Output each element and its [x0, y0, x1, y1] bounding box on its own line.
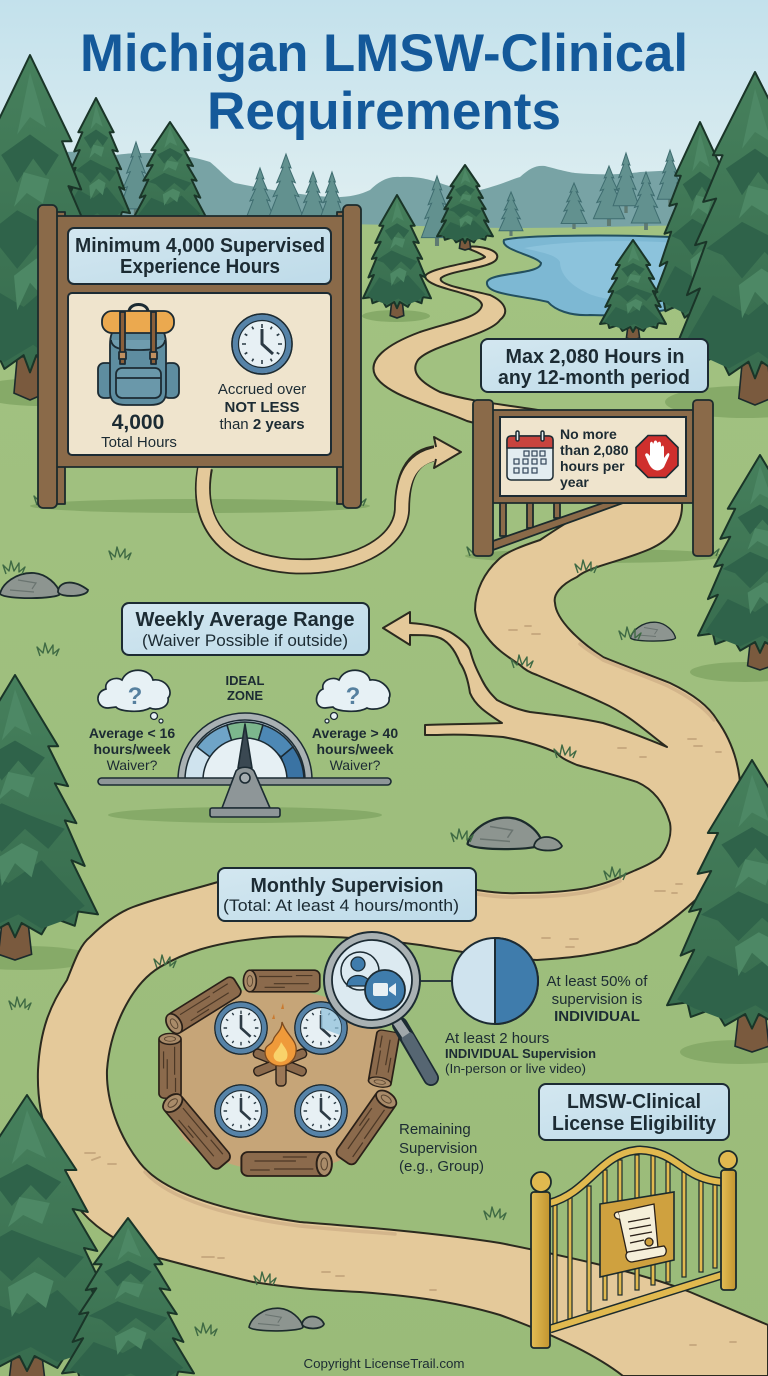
- trail: main section with branch arrow to weekly range: [38, 503, 768, 1376]
- campfire: [252, 1003, 308, 1086]
- thought cloud left: ?: [128, 683, 142, 710]
- label: average under 16: hours/week: [93, 741, 171, 757]
- header panel: Weekly Average Range: [136, 609, 354, 631]
- icon: stop hand: [636, 436, 678, 478]
- arch and bottom rail: [550, 1150, 722, 1329]
- arrow: sign 1 to sign 2: [203, 437, 461, 566]
- label: 4,000 total hours: Total Hours: [101, 434, 177, 451]
- plaque: [600, 1192, 674, 1277]
- bars: [553, 1155, 717, 1325]
- background: sky: [0, 0, 768, 240]
- label: ideal zone: IDEAL: [226, 673, 265, 688]
- left post: [531, 1172, 551, 1348]
- title: [80, 24, 688, 141]
- tree: right lower: [667, 760, 768, 1052]
- header panel: [68, 228, 331, 284]
- label: average over 40: [312, 725, 398, 773]
- label: average over 40: Waiver?: [330, 757, 381, 773]
- distant tree line: [119, 142, 683, 246]
- header: license eligibility: [539, 1084, 729, 1140]
- grass tufts: [3, 492, 719, 1336]
- gate rails: [493, 500, 623, 550]
- gate sign: max hours: [473, 400, 713, 556]
- connector line: [420, 980, 452, 982]
- log seats: [159, 970, 400, 1176]
- distant hills: [0, 152, 768, 260]
- shadow: [108, 807, 382, 823]
- label: accrued over not less than 2 years: Accrued over: [218, 381, 306, 398]
- header: monthly supervision: Monthly Supervision: [250, 875, 444, 897]
- label: at least 2 hours: [445, 1030, 596, 1076]
- header: monthly supervision: (Total: At least 4 hours/month): [223, 897, 459, 915]
- clearing ground: [167, 989, 391, 1172]
- icon: clock: [232, 314, 292, 374]
- label: remaining supervision: Supervision: [399, 1140, 477, 1157]
- icon: person: [341, 952, 379, 990]
- header: license eligibility: License Eligibility: [552, 1112, 717, 1135]
- sign: minimum hours: [38, 205, 361, 508]
- content panel: [68, 293, 331, 455]
- lake: [487, 236, 695, 315]
- tree: left middle: [0, 675, 98, 960]
- pie chart: 50 percent individual: [452, 938, 538, 1024]
- gate posts and board: [473, 400, 713, 556]
- label: at least 50 percent: supervision is: [552, 991, 642, 1008]
- label: remaining supervision: [399, 1121, 484, 1175]
- icon: video camera: [365, 970, 405, 1010]
- header panel: Minimum 4,000 Supervised: [75, 235, 325, 257]
- label: 4,000 total hours: [101, 411, 177, 451]
- header panel: Experience Hours: [120, 256, 280, 278]
- gate text: [560, 426, 629, 490]
- fulcrum and needle: [210, 724, 280, 817]
- label: at least 2 hours: (In-person or live video): [445, 1062, 586, 1076]
- tree: bottom left: [0, 1095, 194, 1376]
- label: at least 50 percent: [547, 973, 648, 1025]
- gauge: [178, 713, 312, 780]
- campfire clearing: [159, 970, 400, 1176]
- section: weekly average range: [89, 603, 398, 823]
- icon: calendar: [507, 431, 553, 480]
- label: ideal zone: [226, 673, 265, 703]
- rocks: [0, 573, 676, 1331]
- tree: centre: [363, 195, 431, 318]
- scroll: [614, 1204, 666, 1262]
- clocks: [215, 1002, 347, 1137]
- label: accrued over not less than 2 years: NOT LESS: [224, 399, 300, 416]
- label: remaining supervision: Remaining: [399, 1121, 471, 1138]
- label: 4,000 total hours: 4,000: [112, 411, 164, 434]
- ground shadows: [0, 310, 768, 1064]
- balance beam: [98, 778, 391, 785]
- label: accrued over not less than 2 years: than 2 years: [219, 416, 305, 433]
- label: average under 16: [89, 725, 175, 773]
- lake highlights: [524, 241, 680, 301]
- label: average over 40: Average > 40: [312, 725, 398, 741]
- label: at least 50 percent: At least 50% of: [547, 973, 648, 990]
- title: Requirements: [207, 82, 561, 141]
- label: average under 16: Average < 16: [89, 725, 175, 741]
- label: remaining supervision: (e.g., Group): [399, 1158, 484, 1175]
- trail: upper winding section: [373, 247, 550, 430]
- tree: horizon pine: [437, 165, 493, 250]
- header: license eligibility: LMSW-Clinical: [567, 1090, 701, 1113]
- gate text: No more: [560, 426, 617, 442]
- label: at least 50 percent: INDIVIDUAL: [554, 1008, 640, 1025]
- header: monthly supervision: [218, 868, 476, 921]
- gate text: year: [560, 474, 589, 490]
- title: Michigan LMSW-Clinical: [80, 24, 688, 83]
- header: max 2,080 hours: [481, 339, 708, 392]
- header panel: [122, 603, 369, 655]
- header: max 2,080 hours: Max 2,080 Hours in: [506, 346, 684, 368]
- magnifying glass: [324, 932, 431, 1078]
- right post: [719, 1151, 737, 1290]
- tree: right middle: [698, 455, 768, 670]
- label: at least 2 hours: INDIVIDUAL Supervision: [445, 1046, 596, 1061]
- gate text: hours per: [560, 458, 625, 474]
- icon: backpack: [98, 304, 179, 405]
- header panel: (Waiver Possible if outside): [142, 631, 348, 650]
- thought cloud right: ?: [346, 683, 360, 710]
- copyright: Copyright LicenseTrail.com: [304, 1357, 464, 1371]
- trail edge shading: [145, 644, 714, 1234]
- label: ideal zone: ZONE: [227, 688, 263, 703]
- sign posts and board: [38, 205, 361, 508]
- label: average under 16: Waiver?: [107, 757, 158, 773]
- tree: right cluster: [600, 72, 768, 405]
- label: accrued over not less than 2 years: [218, 381, 306, 433]
- thought cloud right: [316, 670, 390, 723]
- label: average over 40: hours/week: [316, 741, 394, 757]
- golden gate: [531, 1150, 737, 1348]
- trail pebbles: [85, 626, 736, 1345]
- gate content panel: [500, 417, 686, 496]
- header: max 2,080 hours: any 12-month period: [498, 367, 690, 389]
- label: at least 2 hours: At least 2 hours: [445, 1030, 549, 1047]
- tree: upper left cluster: [0, 55, 206, 400]
- thought cloud left: [98, 670, 170, 723]
- gate text: than 2,080: [560, 442, 629, 458]
